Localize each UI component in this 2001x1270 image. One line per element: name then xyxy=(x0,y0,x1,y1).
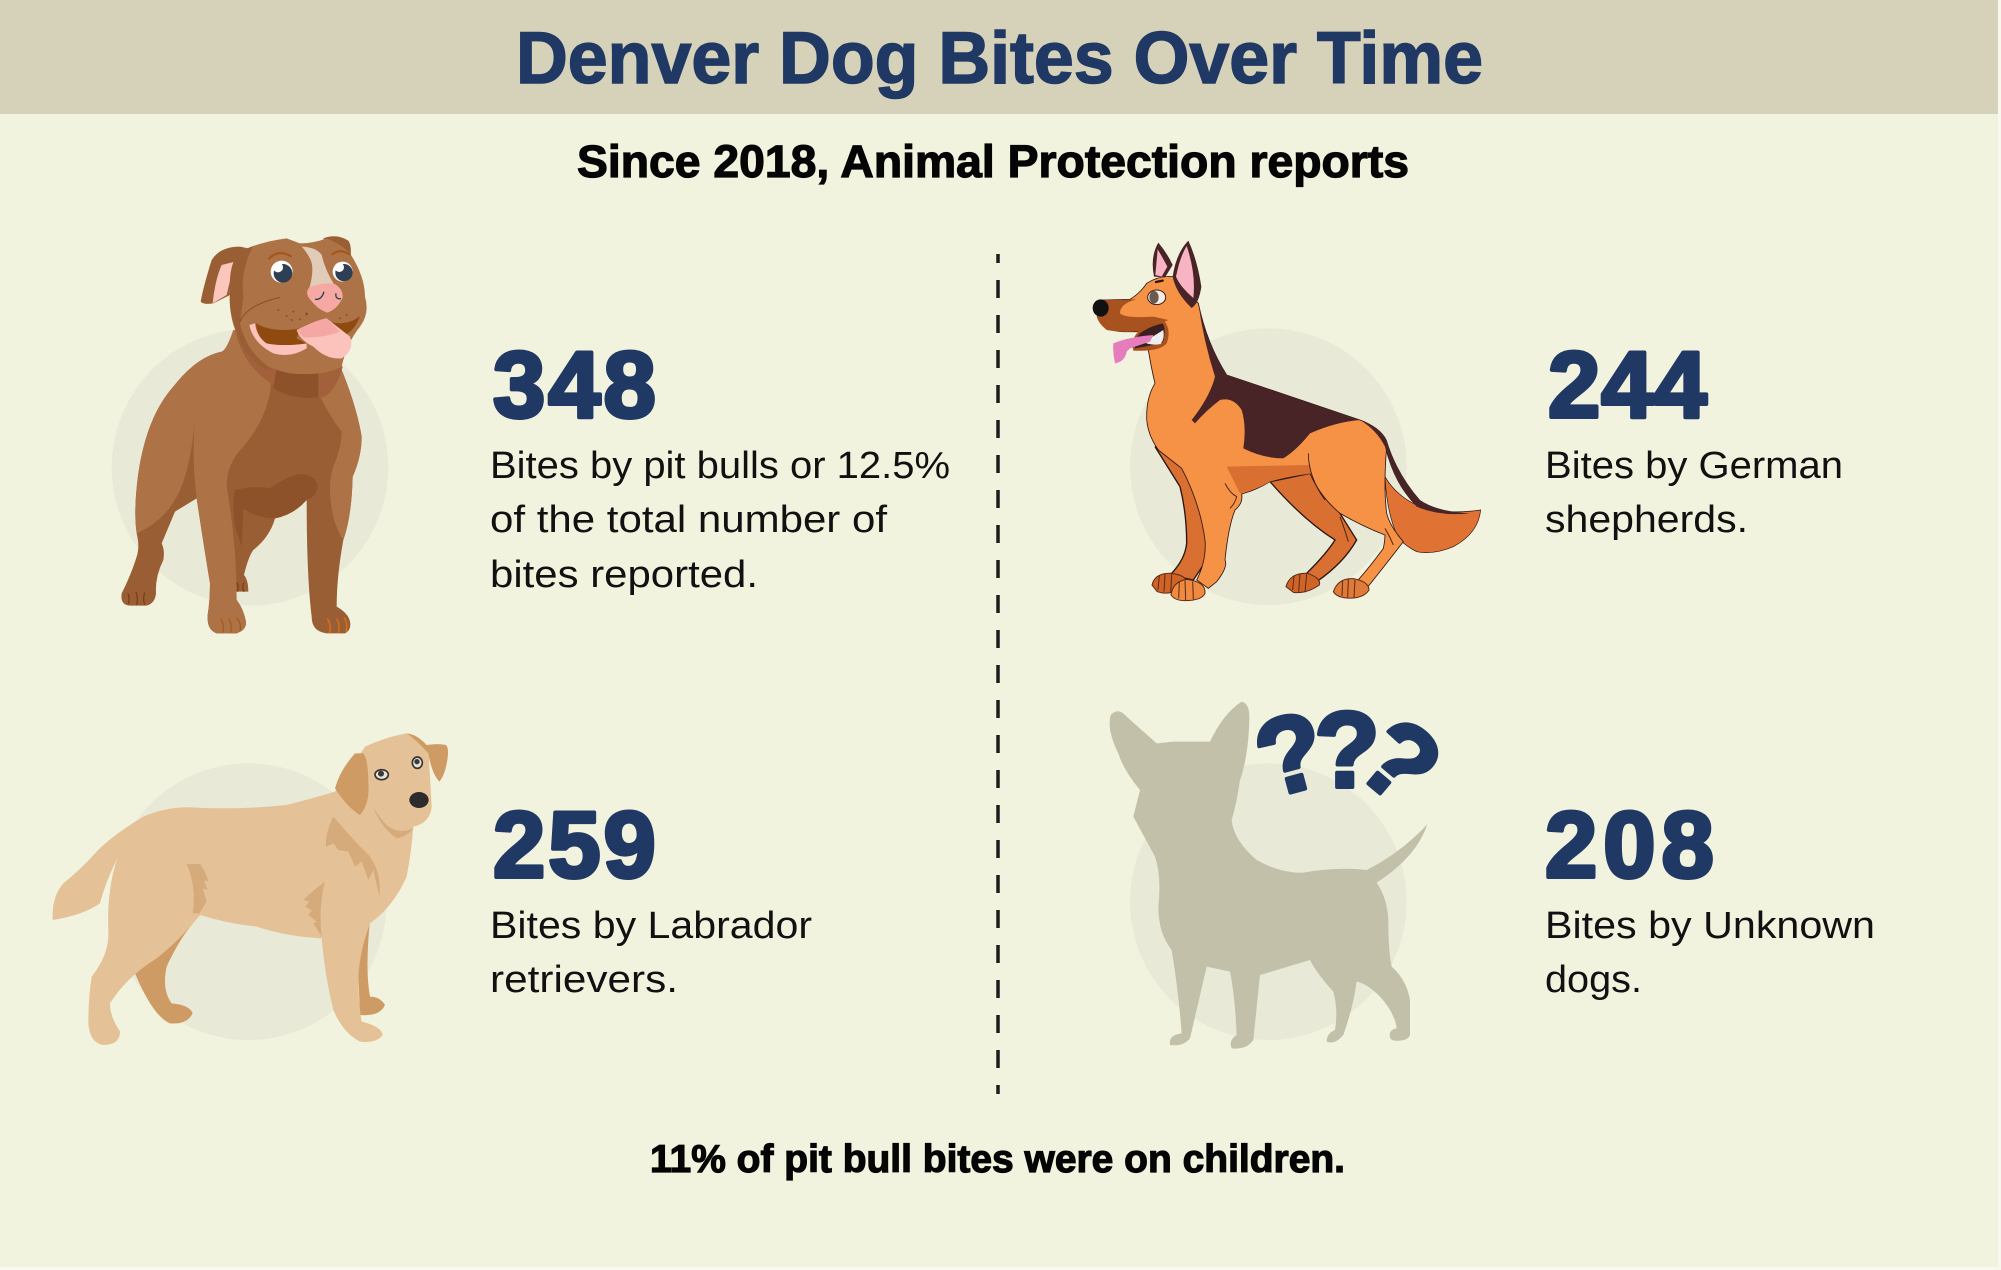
description: pit bulls: of the total number of xyxy=(490,499,887,541)
description: unknown dogs xyxy=(1545,905,1875,1001)
icon: question marks: ? xyxy=(1314,689,1380,810)
description: Labrador retrievers: Bites by Labrador xyxy=(490,905,812,947)
panel: German shepherds xyxy=(1093,241,1843,605)
stat: 348: 348 xyxy=(493,332,659,437)
center dashed divider xyxy=(996,254,1000,1094)
description: Labrador retrievers xyxy=(490,905,812,1001)
icon: pit bull with circle xyxy=(112,236,388,633)
title: Denver Dog Bites Over Time xyxy=(516,18,1483,99)
description: German shepherds xyxy=(1545,445,1843,541)
icon: Labrador with circle xyxy=(53,733,448,1045)
header banner xyxy=(0,0,1998,114)
description: German shepherds: Bites by German xyxy=(1545,445,1843,487)
icon: question marks: ? xyxy=(1336,694,1464,829)
description: pit bulls: bites reported. xyxy=(490,554,758,596)
panel: pit bulls xyxy=(112,236,950,633)
icon: question marks xyxy=(1243,687,1464,829)
icon: German shepherd with circle xyxy=(1093,241,1481,605)
stat: 259: 259 xyxy=(493,792,659,897)
description: pit bulls xyxy=(490,445,950,596)
subtitle: Since 2018, Animal Protection reports xyxy=(577,136,1409,187)
description: Labrador retrievers: retrievers. xyxy=(490,959,678,1001)
description: unknown dogs: dogs. xyxy=(1545,959,1642,1001)
description: unknown dogs: Bites by Unknown xyxy=(1545,905,1875,947)
description: pit bulls: Bites by pit bulls or 12.5% xyxy=(490,445,950,487)
stat: 244: 244 xyxy=(1548,332,1708,437)
stat: 208: 208 xyxy=(1545,792,1720,897)
icon: question marks: ? xyxy=(1243,687,1338,821)
description: German shepherds: shepherds. xyxy=(1545,499,1748,541)
footer note: 11% of pit bull bites were on children. xyxy=(650,1138,1345,1181)
icon: dog silhouette with circle xyxy=(1110,702,1427,1049)
panel: unknown dogs xyxy=(1110,687,1875,1049)
panel: Labrador retrievers xyxy=(53,733,812,1045)
